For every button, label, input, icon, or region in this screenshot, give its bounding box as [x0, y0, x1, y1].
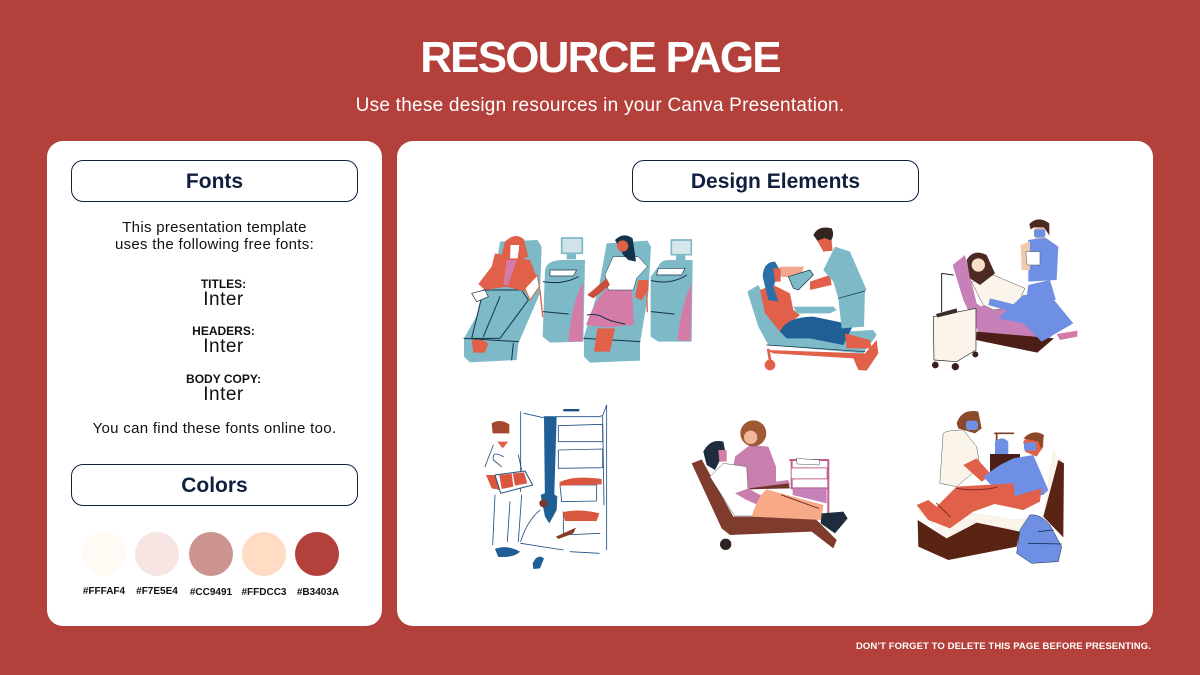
illustration: nurse beside patient on brown chaise — [692, 420, 848, 550]
title: RESOURCE PAGE — [420, 33, 780, 82]
swatch: F7E5E4 — [135, 532, 179, 576]
text: titles font — [201, 277, 246, 310]
swatch: FFFAF4 — [82, 532, 126, 576]
illustration: nurse with seated patient and backpack — [917, 411, 1064, 563]
label: FFDCC3: #FFDCC3 — [241, 587, 286, 598]
illustration: two donors on reclining chairs with machines — [464, 235, 693, 363]
text: body copy font: BODY COPY: — [186, 372, 261, 386]
footer note: DON’T FORGET TO DELETE THIS PAGE BEFORE PRESENTING. — [856, 641, 1151, 652]
text: body copy font: Inter — [203, 384, 244, 405]
panel: design elements — [397, 141, 1153, 626]
swatch: B3403A — [295, 532, 339, 576]
subtitle: Use these design resources in your Canva Presentation. — [356, 95, 844, 116]
text: headers font: Inter — [203, 336, 244, 357]
illustration: medics with blood bags at refrigerator — [485, 405, 607, 569]
text: body copy font — [186, 372, 261, 405]
heading: colors: Colors — [181, 474, 248, 497]
heading: design elements — [632, 160, 919, 202]
swatch: CC9491 — [189, 532, 233, 576]
label: B3403A: #B3403A — [297, 587, 339, 598]
text: titles font: TITLES: — [201, 277, 246, 291]
label: CC9491: #CC9491 — [190, 587, 232, 598]
text: titles font: Inter — [203, 289, 244, 310]
label: F7E5E4: #F7E5E4 — [136, 586, 178, 597]
heading: colors — [71, 464, 358, 506]
heading: fonts: Fonts — [186, 170, 243, 193]
panel: fonts and colors — [47, 141, 382, 626]
label: FFFAF4: #FFFAF4 — [83, 586, 125, 597]
text: fonts note: You can find these fonts online too. — [93, 420, 336, 437]
text: fonts intro: uses the following free fonts: — [115, 236, 314, 253]
text: headers font: HEADERS: — [192, 324, 255, 338]
swatch: FFDCC3 — [242, 532, 286, 576]
heading: design elements: Design Elements — [691, 170, 860, 193]
text: fonts intro — [115, 219, 314, 253]
illustration: nurse with clipboard beside reclining patient — [932, 219, 1077, 370]
illustration: nurse drawing blood from a patient — [747, 227, 878, 371]
text: headers font — [192, 324, 255, 357]
text: fonts intro: This presentation template — [122, 219, 307, 236]
heading: fonts — [71, 160, 358, 202]
